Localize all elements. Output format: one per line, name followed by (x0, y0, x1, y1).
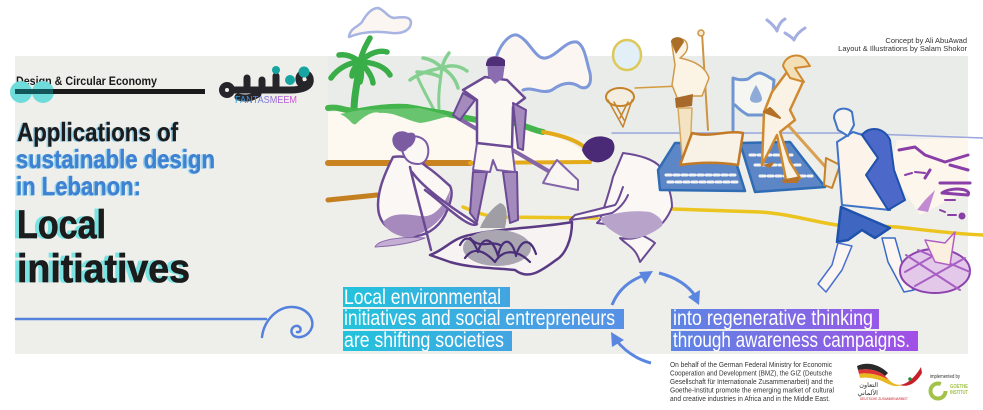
sack (680, 132, 743, 165)
section label: Design & Circular Economy (16, 74, 157, 88)
left caption (343, 286, 624, 352)
funding statement: Cooperation and Development (BMZ), the GIZ (Deutsche (670, 368, 832, 378)
Deutsche Zusammenarbeit logo: التعاون (859, 381, 878, 389)
title: sustainable design (16, 144, 215, 174)
blue rafts (658, 142, 825, 192)
purple basket (900, 232, 970, 293)
Fantasmeem logo (219, 66, 310, 106)
birds (767, 19, 805, 40)
left caption: are shifting societies (344, 329, 504, 352)
man with backpack (818, 109, 914, 292)
woman kneeling (375, 131, 477, 250)
credits: Layout & Illustrations by Salam Shokor (838, 44, 967, 53)
right caption (671, 307, 918, 352)
left caption: initiatives and social entrepreneurs (344, 307, 615, 330)
flag (733, 73, 774, 130)
gold and orange lines (543, 132, 583, 146)
Goethe-Institut logo: GOETHE (950, 384, 969, 390)
title: Applications of (17, 117, 178, 147)
water drop on flag (750, 85, 762, 103)
horizon line (612, 133, 983, 138)
palm right (410, 53, 467, 110)
funding statement: Goethe-Institut promote the emerging market of cultural (670, 386, 834, 394)
illustration: beach scene (328, 8, 983, 293)
cloud left (349, 8, 411, 37)
green shoreline (328, 107, 543, 132)
funding statement (670, 360, 834, 403)
net and woman with paddle (606, 30, 709, 155)
cycle arrows (611, 271, 700, 363)
title (16, 117, 215, 291)
right caption: through awareness campaigns. (673, 329, 910, 352)
sun ring (613, 40, 641, 70)
Goethe-Institut logo: INSTITUT (950, 390, 968, 396)
right caption: into regenerative thinking (673, 307, 873, 330)
left caption: Local environmental (344, 286, 501, 309)
Deutsche Zusammenarbeit logo: DEUTSCHE ZUSAMMENARBEIT (860, 397, 909, 401)
sky tint (328, 56, 968, 135)
man digging (453, 56, 578, 223)
paper background panel (15, 56, 968, 354)
section rule with teal circles (10, 81, 205, 103)
sand strip (328, 109, 592, 163)
purple debris (899, 147, 970, 218)
Goethe-Institut logo: implemented by (930, 374, 960, 380)
net with debris (430, 203, 572, 275)
man crouching (570, 136, 672, 262)
Goethe-Institut logo (930, 374, 969, 398)
funding statement: and creative industries in Africa and in the Middle East. (670, 394, 830, 403)
credits (838, 36, 967, 53)
title: in Lebanon: (16, 171, 141, 201)
white area right (890, 138, 968, 215)
palm left (331, 38, 390, 120)
man with rake (762, 55, 840, 188)
Fantasmeem logo: FANTASMEEM (235, 95, 297, 106)
funding statement: On behalf of the German Federal Ministry for Economic (670, 360, 832, 369)
decorative line with spiral (16, 307, 312, 337)
title: Local (17, 203, 106, 247)
cloud right (497, 35, 591, 92)
Deutsche Zusammenarbeit logo (857, 364, 922, 401)
title: initiatives (17, 247, 190, 291)
credits: Concept by Ali AbuAwad (885, 36, 967, 45)
funding statement: Gesellschaft für Internationale Zusammenarbeit) and the (670, 377, 833, 386)
Deutsche Zusammenarbeit logo: الألماني (858, 387, 878, 397)
